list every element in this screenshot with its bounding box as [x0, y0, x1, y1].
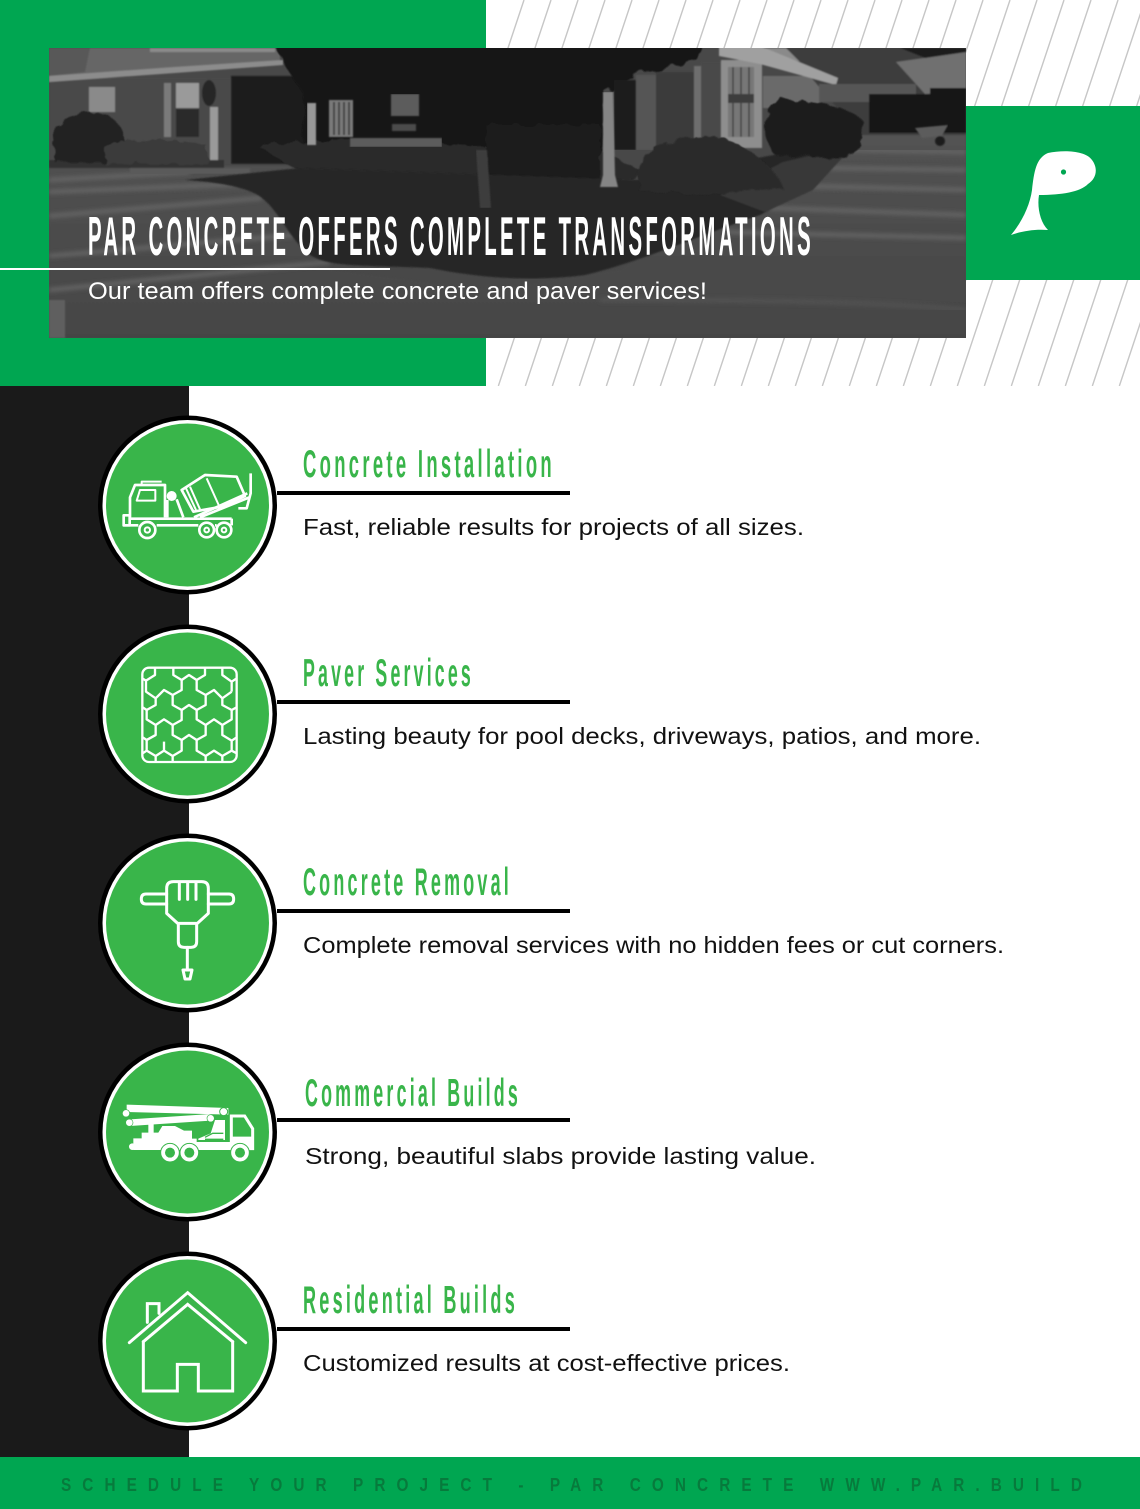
icon: pump truck	[122, 1105, 254, 1162]
text: residential builds: Customized results at cost-effective prices.	[303, 1350, 790, 1376]
panel: concrete installation	[98, 416, 570, 594]
text: Concrete Installation	[303, 443, 555, 486]
icon: house	[129, 1293, 246, 1391]
driveway stripes	[49, 150, 966, 293]
tree trunks	[476, 92, 948, 208]
panel: paver services	[98, 624, 570, 804]
subtitle: Our team offers complete concrete and paver services!	[88, 278, 707, 305]
header rule	[0, 268, 390, 270]
text: commercial builds: Strong, beautiful slabs provide lasting value.	[305, 1143, 816, 1169]
text: Concrete Removal	[303, 861, 512, 904]
driveway surface	[49, 133, 966, 338]
panel: hero photo	[49, 44, 966, 338]
right shrubs	[639, 99, 863, 195]
background stripes	[460, 0, 1140, 386]
text: Residential Builds	[303, 1279, 518, 1322]
black side panel	[0, 386, 189, 1457]
porch items	[307, 94, 442, 147]
green header block	[0, 0, 486, 386]
icon: mixer truck	[123, 473, 251, 538]
tree canopy and foliage	[53, 44, 705, 188]
panel: commercial builds	[98, 1042, 570, 1222]
text: Commercial Builds	[305, 1072, 521, 1115]
icon: paver pattern	[142, 668, 237, 762]
front lawn	[187, 154, 842, 279]
text: concrete installation: Fast, reliable results for projects of all sizes.	[303, 514, 804, 540]
text: paver services: Lasting beauty for pool decks, driveways, patios, and more.	[303, 723, 981, 749]
icon: jackhammer	[141, 882, 234, 979]
panel: concrete removal	[98, 834, 570, 1012]
footer band	[0, 1457, 1140, 1509]
text: Paver Services	[303, 652, 474, 695]
logo panel	[966, 106, 1140, 280]
icon: P logo	[1011, 151, 1096, 235]
text: concrete removal: Complete removal services with no hidden fees or cut corners.	[303, 932, 1004, 958]
right house	[614, 46, 966, 150]
panel: residential builds	[98, 1252, 570, 1430]
left house	[49, 48, 309, 174]
